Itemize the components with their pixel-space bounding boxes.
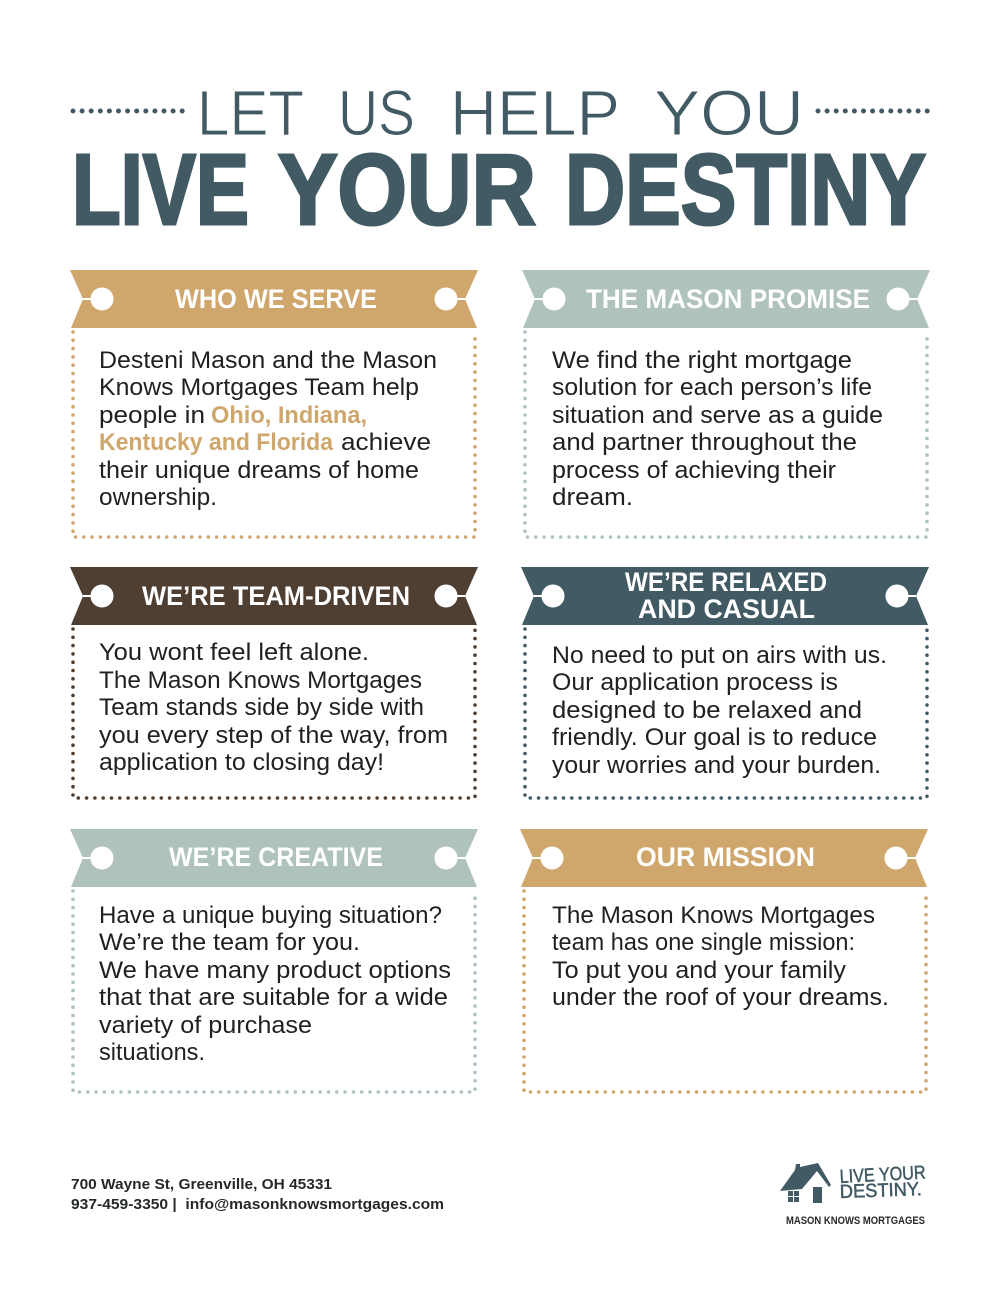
body text: solution for each person’s life: [552, 374, 872, 401]
title: LIVE: [72, 134, 249, 246]
body text: team has one single mission:: [552, 929, 855, 956]
ribbon: [522, 270, 930, 328]
body text: that that are suitable for a wide: [99, 984, 448, 1011]
body text: [99, 639, 448, 776]
heading: AND CASUAL: [638, 594, 815, 624]
ribbon pins: [533, 847, 915, 869]
heading: WE’RE CREATIVE: [169, 842, 383, 872]
body text: application to closing day!: [99, 749, 384, 776]
body text: situations.: [99, 1039, 205, 1066]
dotted box: [525, 332, 927, 537]
body text: [552, 642, 887, 779]
ribbon pins: [83, 847, 465, 869]
dotted box: [525, 629, 927, 798]
panel: we're creative: [70, 829, 478, 1092]
title: US: [338, 77, 415, 149]
body text: Desteni Mason and the Mason: [99, 347, 437, 374]
body text: We’re the team for you.: [99, 929, 360, 956]
body text: you every step of the way, from: [99, 722, 448, 749]
logo name: MASON KNOWS MORTGAGES: [786, 1215, 925, 1227]
title: LET: [197, 77, 304, 149]
body text: [552, 902, 889, 1011]
body text: You wont feel left alone.: [99, 639, 369, 666]
body text: dream.: [552, 484, 633, 511]
title: DESTINY: [565, 134, 926, 246]
body text: [99, 902, 451, 1066]
body text: Ohio, Indiana,: [211, 402, 367, 429]
dotted box: [73, 891, 475, 1092]
heading: THE MASON PROMISE: [586, 284, 870, 314]
body text: Have a unique buying situation?: [99, 902, 442, 929]
body text: under the roof of your dreams.: [552, 984, 889, 1011]
panel: we're relaxed and casual: [521, 567, 929, 798]
ribbon: [521, 567, 929, 625]
title: HELP: [450, 77, 620, 149]
contact details: 937-459-3350 | info@masonknowsmortgages.com: [71, 1197, 444, 1213]
ribbon pins: [535, 288, 917, 310]
body text: We find the right mortgage: [552, 347, 852, 374]
body text: Our application process is: [552, 669, 838, 696]
ribbon pins: [534, 585, 916, 607]
title: [72, 77, 929, 246]
ribbon: [70, 567, 478, 625]
body text: and partner throughout the: [552, 429, 857, 456]
contact details: [71, 1177, 444, 1213]
body text: their unique dreams of home: [99, 457, 419, 484]
body text: ownership.: [99, 484, 217, 511]
panel: who we serve: [70, 270, 478, 537]
body text: people in: [99, 402, 205, 429]
heading: [625, 567, 827, 624]
dotted box: [73, 629, 475, 798]
body text: [99, 347, 437, 511]
body text: No need to put on airs with us.: [552, 642, 887, 669]
body text: your worries and your burden.: [552, 752, 881, 779]
contact details: 700 Wayne St, Greenville, OH 45331: [71, 1177, 332, 1193]
heading: OUR MISSION: [636, 842, 815, 872]
panel: our mission: [520, 829, 928, 1092]
body text: situation and serve as a guide: [552, 402, 883, 429]
dotted box: [524, 891, 926, 1092]
ribbon: [70, 829, 478, 887]
body text: [552, 347, 883, 511]
ribbon: [520, 829, 928, 887]
heading: WE’RE TEAM-DRIVEN: [142, 581, 410, 611]
logo wordmark: LIVE YOUR: [839, 1163, 926, 1188]
ribbon pins: [83, 288, 465, 310]
logo: [780, 1163, 926, 1227]
body text: process of achieving their: [552, 457, 836, 484]
body text: Knows Mortgages Team help: [99, 374, 419, 401]
body text: Kentucky and Florida: [99, 429, 333, 456]
heading: WHO WE SERVE: [175, 284, 377, 314]
body text: variety of purchase: [99, 1012, 312, 1039]
logo wordmark: [839, 1163, 926, 1203]
body text: designed to be relaxed and: [552, 697, 862, 724]
body text: We have many product options: [99, 957, 451, 984]
body text: The Mason Knows Mortgages: [99, 667, 422, 694]
title: YOUR: [278, 134, 536, 246]
body text: The Mason Knows Mortgages: [552, 902, 875, 929]
ribbon pins: [83, 585, 465, 607]
body text: achieve: [341, 429, 431, 456]
heading: WE’RE RELAXED: [625, 567, 827, 597]
logo wordmark: DESTINY.: [839, 1179, 922, 1203]
title: YOU: [654, 77, 804, 149]
dotted box: [73, 332, 475, 537]
ribbon: [70, 270, 478, 328]
panel: the mason promise: [522, 270, 930, 537]
panel: we're team-driven: [70, 567, 478, 798]
icon: house: [780, 1163, 831, 1203]
body text: To put you and your family: [552, 957, 847, 984]
body text: Team stands side by side with: [99, 694, 424, 721]
body text: friendly. Our goal is to reduce: [552, 724, 877, 751]
